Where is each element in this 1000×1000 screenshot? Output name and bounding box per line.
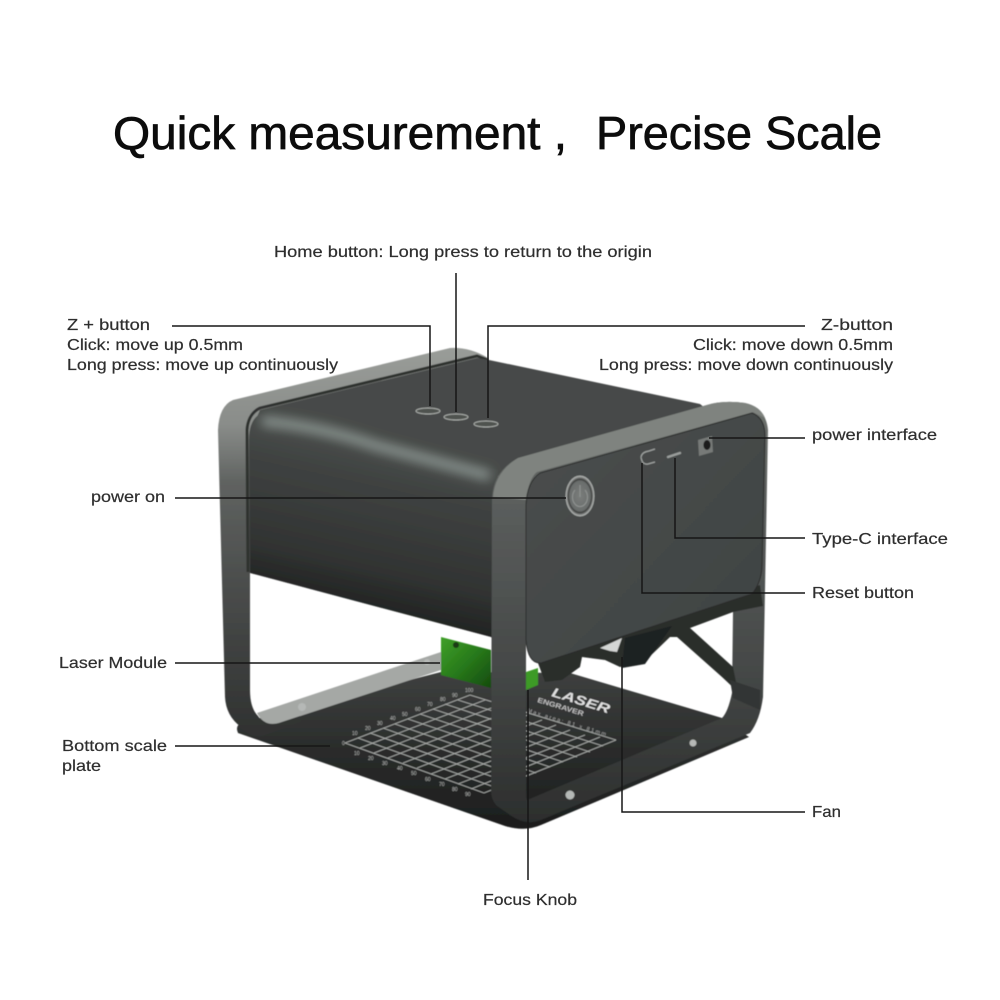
laser module — [441, 637, 491, 688]
type-C port — [668, 453, 680, 457]
callout: fan — [622, 657, 841, 821]
rear mechanism — [526, 585, 763, 710]
grid tick numbers: 90 — [452, 693, 458, 699]
arch groove — [247, 356, 488, 572]
ring top highlight — [493, 402, 765, 500]
grid tick numbers: 20 — [368, 756, 374, 762]
callout: Z + button — [67, 317, 430, 406]
body highlight — [262, 421, 490, 476]
grid tick numbers: 60 — [415, 707, 421, 713]
plate branding: ENGRAVER — [536, 697, 584, 718]
scale grid — [345, 695, 616, 793]
callout: Z- button — [488, 317, 893, 418]
grid tick numbers: 50 — [411, 771, 417, 777]
grid tick numbers: 0 — [342, 741, 345, 747]
title: Quick measurement , — [113, 107, 567, 159]
callout: power on: power on — [91, 489, 165, 506]
grid tick numbers: 90 — [465, 792, 471, 798]
callout: Z- button: Long press: move down continuously — [599, 357, 893, 374]
plate branding: Max area: 81 x 81mm — [526, 708, 607, 738]
grid tick numbers: 70 — [427, 702, 433, 708]
callout: Z + button: Long press: move up continuously — [67, 357, 338, 374]
grid tick numbers: 10 — [352, 731, 358, 737]
callout: power interface: power interface — [812, 427, 937, 444]
body top face — [254, 358, 720, 476]
top button: Z + — [416, 408, 440, 414]
frame screws — [298, 659, 696, 800]
grid tick numbers: 20 — [365, 726, 371, 732]
grid tick numbers — [342, 688, 474, 798]
callout: Z- button: Z-button — [821, 317, 893, 334]
front frame ring — [491, 402, 768, 822]
power button — [566, 476, 594, 516]
bottom scale plate — [237, 672, 749, 829]
grid tick numbers: 60 — [425, 777, 431, 783]
back strip of frame — [257, 652, 441, 724]
callout: focus knob: Focus Knob — [483, 892, 577, 909]
grid tick numbers: 30 — [382, 761, 388, 767]
reset button port — [641, 449, 655, 464]
callout: Z- button: Click: move down 0.5mm — [693, 337, 893, 354]
power jack — [698, 436, 713, 456]
top button: home — [444, 414, 468, 420]
grid tick numbers: 80 — [452, 787, 458, 793]
callout: reset button: Reset button — [812, 585, 914, 602]
callout: fan: Fan — [812, 804, 841, 821]
laser engraver device illustration — [218, 348, 768, 829]
callout: Z + button: Z + button — [67, 317, 150, 334]
callout: type-C interface — [675, 458, 948, 548]
callout: bottom scale plate — [62, 738, 330, 775]
grid tick numbers: 100 — [465, 688, 474, 694]
callout: type-C interface: Type-C interface — [812, 531, 948, 548]
grid tick numbers: 70 — [439, 782, 445, 788]
title: Precise Scale — [596, 107, 882, 159]
plate branding — [526, 685, 613, 738]
grid tick numbers: 30 — [377, 721, 383, 727]
grid tick numbers: 50 — [402, 712, 408, 718]
callout: Z + button: Click: move up 0.5mm — [67, 337, 243, 354]
grid tick numbers: 40 — [390, 716, 396, 722]
callout: bottom scale plate: plate — [62, 758, 101, 775]
title — [113, 107, 882, 159]
callout: laser module: Laser Module — [59, 655, 167, 672]
grid tick numbers: 10 — [354, 751, 360, 757]
top button: Z - — [474, 421, 498, 427]
callout: reset button — [642, 463, 914, 602]
callout: home button: Home button: Long press to return to the origin — [274, 244, 652, 261]
grid tick numbers: 80 — [440, 697, 446, 703]
front panel — [526, 413, 765, 663]
grid tick numbers: 40 — [397, 766, 403, 772]
callout: bottom scale plate: Bottom scale — [62, 738, 167, 755]
plate branding: LASER — [550, 685, 613, 717]
body side face — [249, 414, 500, 650]
back frame arch — [218, 348, 489, 736]
